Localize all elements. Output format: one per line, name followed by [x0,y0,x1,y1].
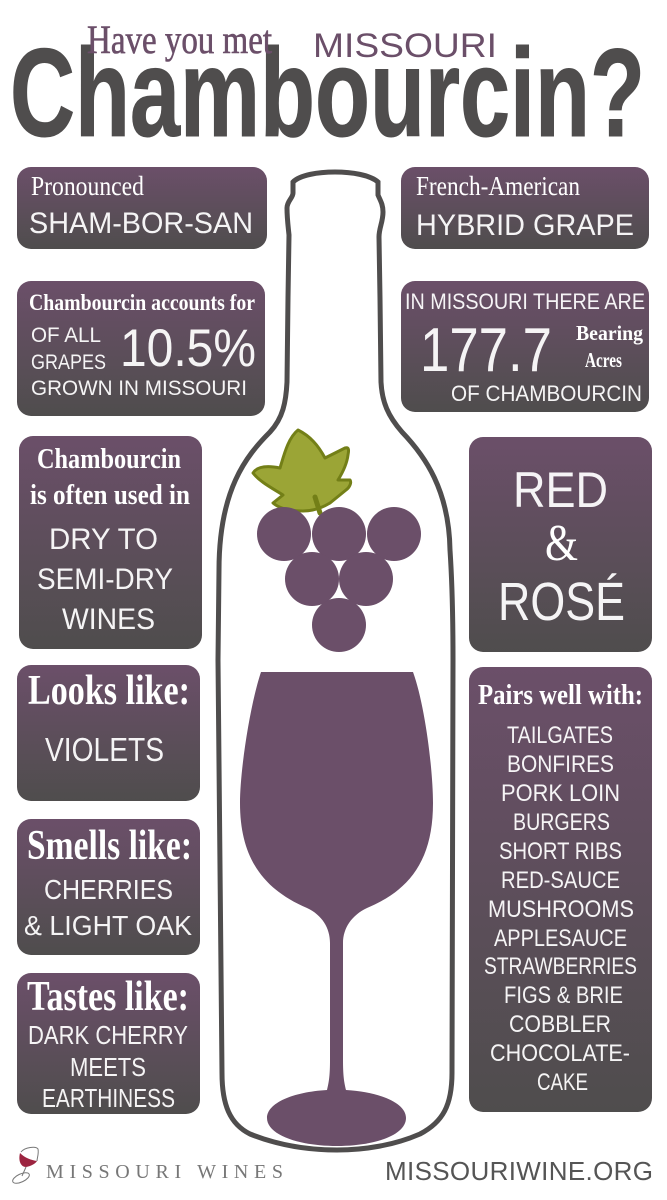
icon: grape leaf [253,430,351,513]
panel: tastes like: DARK CHERRY [28,1020,188,1050]
logo: missouri wines [11,1147,283,1185]
panel: smells like: Smells like: [27,823,192,869]
panel: pairs well with [469,667,652,1112]
panel: share of grapes: 10.5% [120,319,256,378]
bottle outline [218,172,453,1150]
panel: wine style: DRY TO [49,523,158,556]
panel: share of grapes [17,281,265,416]
panel: pairs well with: BONFIRES [507,751,614,778]
panel: hybrid grape [401,167,649,249]
panel: pairs well with: CHOCOLATE- [490,1040,630,1067]
panel: share of grapes: Chambourcin accounts for [29,290,255,315]
panel: tastes like: EARTHINESS [42,1083,175,1113]
panel: pronounced [17,167,267,249]
panel: pairs well with: RED-SAUCE [501,867,620,894]
panel: hybrid grape: HYBRID GRAPE [416,209,634,242]
panel: pairs well with: SHORT RIBS [499,838,622,865]
panel: smells like: CHERRIES [44,874,173,905]
title [10,17,645,163]
panel: bearing acres [401,281,649,412]
panel: share of grapes: GROWN IN MISSOURI [31,377,247,400]
panel: tastes like: Tastes like: [27,974,189,1020]
icon: logo wine glass [11,1147,38,1185]
panel: pronounced: Pronounced [31,171,144,201]
panel: red and rose [469,437,652,652]
panel: bearing acres: 177.7 [420,316,552,385]
panel: pairs well with: APPLESAUCE [494,925,627,952]
panel: looks like: Looks like: [28,668,190,714]
panel: bearing acres: IN MISSOURI THERE ARE [405,289,645,314]
panel: red and rose: ROSÉ [498,572,625,632]
icon: wine glass [240,672,433,1146]
panel: hybrid grape: French-American [416,171,580,201]
panel: pairs well with: TAILGATES [507,722,613,749]
panel: pairs well with: Pairs well with: [478,679,643,711]
panel: share of grapes: GRAPES [31,351,106,374]
panel: pronounced: SHAM-BOR-SAN [29,207,253,240]
panel: pairs well with: PORK LOIN [501,780,620,807]
panel: wine style: SEMI-DRY [37,563,173,596]
panel: tastes like: MEETS [70,1052,146,1082]
subtitle: missouri: MISSOURI [313,27,497,65]
panel: wine style: WINES [62,603,155,636]
panel: bearing acres: Bearing [576,321,643,345]
logo: missouri wines: MISSOURI WINES [46,1161,283,1183]
panel: wine style: Chambourcin [37,443,181,475]
icon: grape cluster [257,507,421,652]
panel: share of grapes: OF ALL [31,324,101,347]
subtitle: have you met: Have you met [87,17,272,62]
panel: wine style [19,436,202,649]
panel: red and rose: & [545,515,578,572]
panel: pairs well with: MUSHROOMS [488,896,634,923]
panel: smells like: & LIGHT OAK [24,910,192,941]
panel: looks like [17,665,200,801]
panel: looks like: VIOLETS [45,731,164,768]
panel: smells like [17,819,200,955]
panel: red and rose: RED [513,462,608,518]
panel: pairs well with: BURGERS [513,809,610,836]
panel: bearing acres: Acres [585,348,622,372]
panel: tastes like [17,973,200,1114]
panel: wine style: is often used in [30,479,190,511]
panel: pairs well with: COBBLER [509,1011,611,1038]
website url: MISSOURIWINE.ORG [385,1156,653,1186]
panel: pairs well with: CAKE [537,1069,588,1096]
panel: bearing acres: OF CHAMBOURCIN [451,381,642,406]
panel: pairs well with: FIGS & BRIE [504,982,623,1009]
